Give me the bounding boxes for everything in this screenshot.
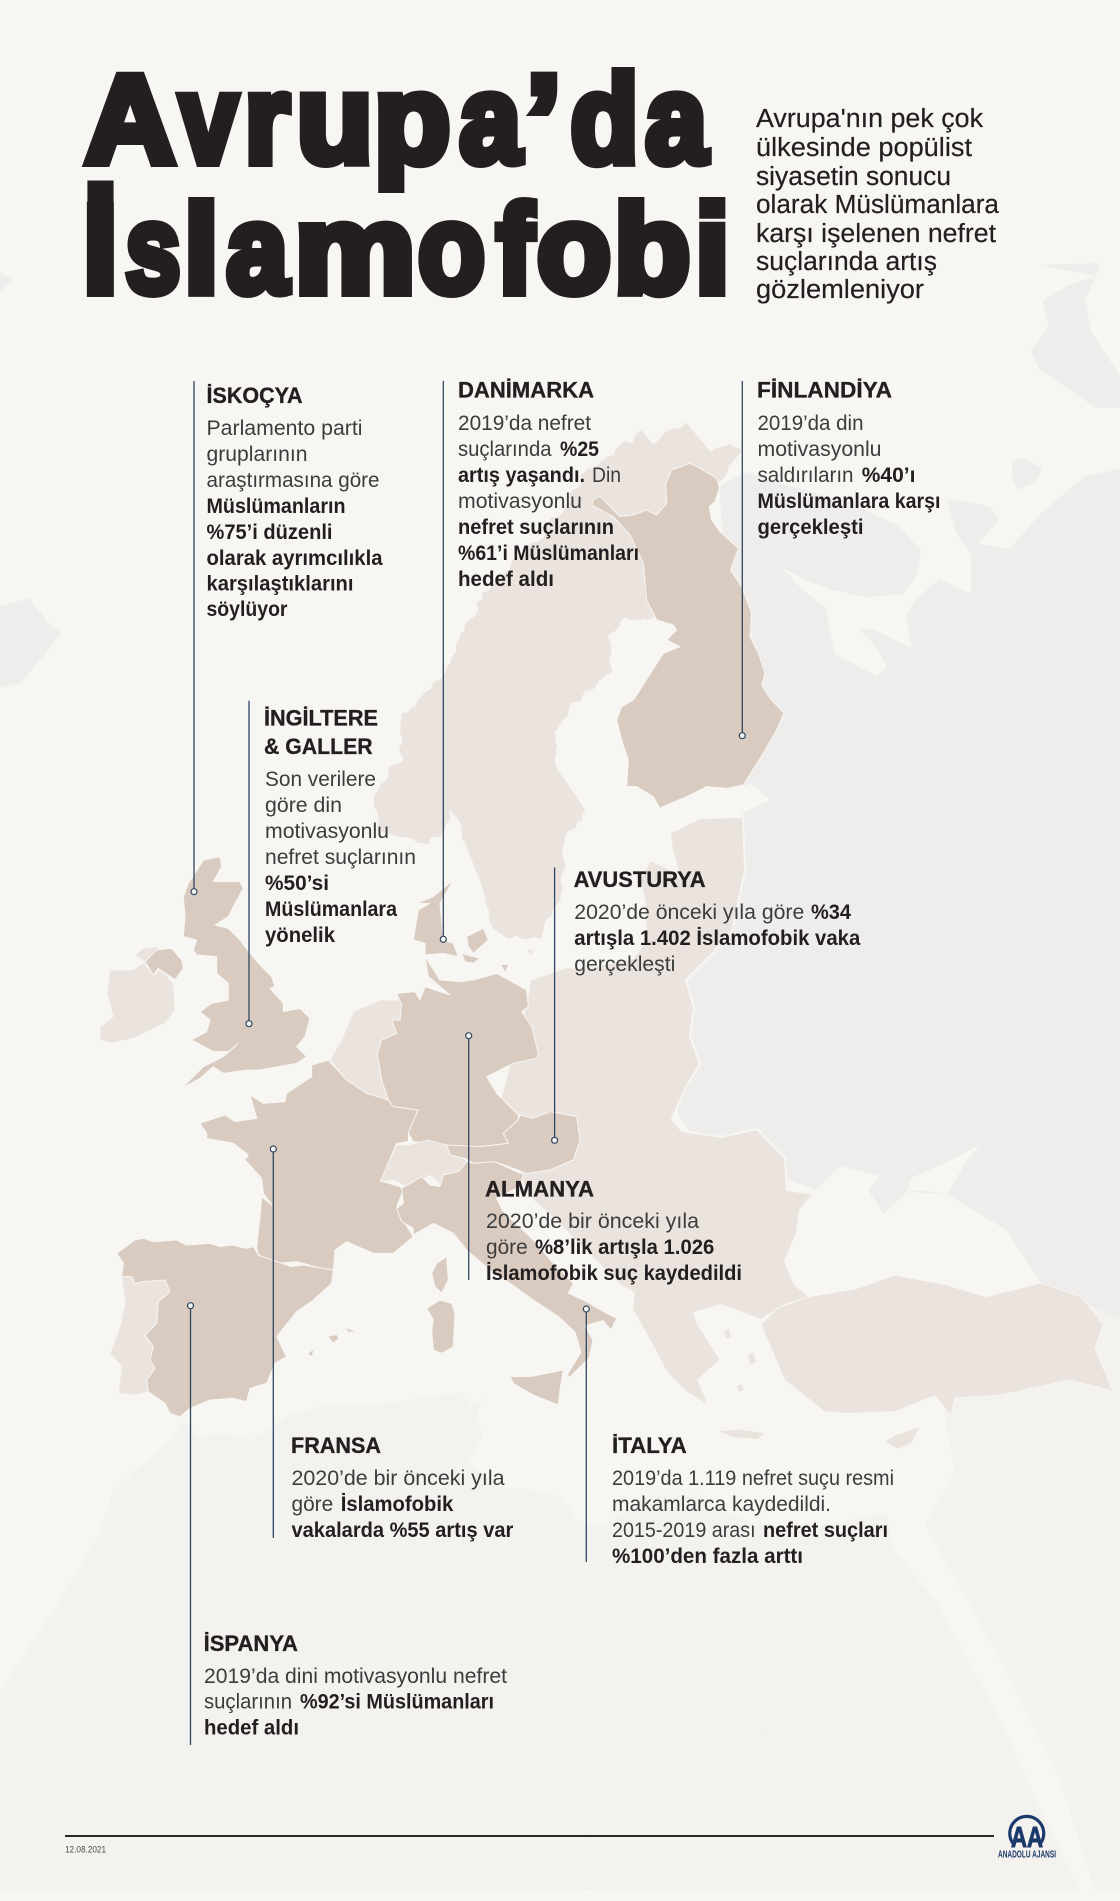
body: Müslümanlara	[265, 898, 397, 921]
body: karşılaştıklarını	[206, 572, 354, 596]
heading	[264, 706, 378, 759]
leader line	[190, 1309, 192, 1745]
Norway and Sweden	[371, 422, 743, 940]
Kolguev island	[1012, 458, 1042, 490]
Denmark	[413, 880, 533, 972]
panel: Finlandiya	[739, 378, 940, 739]
title: i	[695, 180, 730, 320]
body: %8’lik artışla 1.026	[535, 1236, 714, 1259]
body: motivasyonlu	[458, 489, 582, 513]
Sardinia	[427, 1300, 455, 1353]
logo letters: AA	[1011, 1822, 1043, 1854]
body: gerçekleşti	[758, 516, 864, 539]
logo arc	[1010, 1816, 1044, 1844]
body	[204, 1664, 507, 1740]
footer rule	[65, 1835, 994, 1837]
western Europe countries	[100, 857, 580, 1272]
body: göre	[292, 1492, 333, 1516]
title: a	[646, 50, 708, 190]
marker	[583, 1306, 589, 1312]
body	[458, 411, 639, 591]
marker	[270, 1146, 276, 1152]
body: makamlarca kaydedildi.	[612, 1492, 831, 1516]
leader line	[272, 1152, 274, 1538]
intro text: olarak Müslümanlara	[756, 191, 1000, 219]
heading: İTALYA	[612, 1433, 687, 1458]
heading: FİNLANDİYA	[757, 378, 892, 402]
Italy	[397, 1162, 617, 1378]
body	[265, 767, 416, 947]
marker	[246, 1021, 252, 1027]
title: a	[226, 180, 289, 320]
Finland	[592, 463, 784, 808]
body: suçlarında	[458, 437, 552, 461]
logo wordmark: ANADOLU AJANSI	[998, 1849, 1056, 1860]
Svalbard fragment	[0, 272, 12, 292]
Cyprus and Crete	[719, 1427, 919, 1449]
body: motivasyonlu	[758, 437, 882, 461]
Sea of Azov	[907, 1145, 980, 1194]
body: vakalarda %55 artış var	[292, 1519, 513, 1542]
body: 2019’da dini motivasyonlu nefret	[204, 1664, 507, 1688]
title: ’	[526, 50, 561, 190]
title: p	[374, 50, 450, 190]
marker	[552, 1137, 558, 1143]
body: artış yaşandı.	[458, 464, 585, 487]
body: %75’i düzenli	[206, 521, 332, 544]
title: d	[570, 50, 638, 190]
body: 2019’da 1.119 nefret suçu resmi	[612, 1466, 894, 1490]
title: İ	[83, 180, 118, 320]
body: göre	[486, 1235, 528, 1259]
body	[486, 1209, 742, 1285]
heading: & GALLER	[264, 734, 373, 759]
body: nefret suçları	[763, 1519, 888, 1542]
leader line	[741, 381, 743, 733]
body: suçlarının	[204, 1690, 292, 1714]
leader line	[193, 381, 195, 889]
heading: İSKOÇYA	[206, 383, 303, 408]
Portugal	[110, 1277, 170, 1395]
marker	[466, 1033, 472, 1039]
southern Europe countries	[110, 1162, 617, 1417]
body: göre din	[265, 793, 342, 817]
body: hedef aldı	[458, 568, 554, 591]
body: 2019’da nefret	[458, 411, 591, 435]
title: a	[460, 50, 522, 190]
Switzerland	[380, 1140, 467, 1187]
marker	[739, 733, 745, 739]
Aegean islands	[724, 1329, 756, 1392]
Iceland	[0, 598, 61, 687]
intro text: Avrupa'nın pek çok	[756, 105, 983, 133]
body	[612, 1466, 894, 1568]
body: Son verilere	[265, 767, 376, 791]
Balearic Islands	[308, 1328, 355, 1356]
bottom margin strip	[0, 1890, 1120, 1901]
body: Parlamento parti	[206, 416, 362, 440]
body: %25	[560, 438, 599, 461]
title: v	[180, 50, 238, 190]
body: nefret suçlarının	[458, 516, 614, 539]
body	[574, 900, 861, 976]
Russia, Ukraine and Belarus land	[670, 469, 1120, 1320]
body: Müslümanlara karşı	[758, 490, 940, 513]
title: o	[418, 180, 485, 320]
Sicily	[510, 1370, 563, 1405]
body: artışla 1.402 İslamofobik vaka	[574, 927, 861, 950]
marker	[440, 936, 446, 942]
marker	[191, 889, 197, 895]
date: 12.08.2021	[65, 1845, 106, 1855]
logo: Anadolu Ajansı	[998, 1816, 1056, 1860]
intro text: karşı işelenen nefret	[756, 220, 996, 248]
leader line	[554, 868, 556, 1138]
Novaya Zemlya	[1031, 263, 1120, 408]
faint eastern border lines	[500, 1016, 990, 1162]
north Africa land	[0, 1392, 1080, 1890]
Ireland	[100, 947, 175, 1043]
leader line	[248, 701, 250, 1021]
body: %61’i Müslümanları	[458, 542, 639, 565]
leader line	[585, 1312, 587, 1562]
body: hedef aldı	[204, 1716, 299, 1740]
heading: ALMANYA	[485, 1176, 594, 1202]
body: motivasyonlu	[265, 819, 389, 843]
body: %40’ı	[862, 464, 915, 487]
Northern Ireland	[145, 948, 183, 980]
body: gruplarının	[206, 442, 308, 466]
panel: İngiltere ve Galler	[246, 701, 416, 1027]
body	[292, 1466, 513, 1542]
title: s	[126, 180, 180, 320]
heading: FRANSA	[291, 1433, 381, 1458]
Turkey	[761, 1275, 1113, 1415]
body	[206, 416, 383, 621]
leader line	[442, 381, 444, 936]
body: 2020’de bir önceki yıla	[486, 1209, 699, 1233]
body: 2019’da din	[758, 411, 864, 435]
Netherlands and Belgium	[330, 1000, 402, 1100]
body: İslamofobik	[341, 1493, 454, 1516]
title: b	[614, 180, 690, 320]
body: gerçekleşti	[574, 952, 675, 976]
intro text: ülkesinde popülist	[756, 134, 972, 162]
intro text	[756, 105, 1000, 304]
middle east land	[925, 1250, 1120, 1890]
faint African border lines	[0, 1500, 990, 1890]
body: %100’den fazla arttı	[612, 1545, 803, 1568]
panel: Fransa	[270, 1146, 513, 1542]
Great Britain	[182, 857, 310, 1088]
body: Din	[592, 463, 621, 487]
heading: AVUSTURYA	[574, 867, 706, 892]
body: 2020’de bir önceki yıla	[292, 1466, 505, 1490]
body: %92’si Müslümanları	[300, 1691, 494, 1714]
panel: İspanya	[188, 1303, 507, 1745]
panel: İskoçya	[191, 381, 383, 895]
heading: İNGİLTERE	[264, 706, 378, 730]
Spain	[117, 1238, 333, 1417]
Corsica	[432, 1257, 448, 1293]
intro text: gözlemleniyor	[756, 276, 925, 304]
panel: İtalya	[583, 1306, 894, 1568]
heading: İSPANYA	[204, 1631, 298, 1656]
body: araştırmasına göre	[206, 468, 380, 492]
title: A	[85, 50, 175, 190]
intro text: suçlarında artış	[756, 248, 937, 276]
body: İslamofobik suç kaydedildi	[486, 1262, 742, 1285]
Austria	[447, 1112, 580, 1173]
Germany	[377, 957, 538, 1150]
eastern Europe and Balkans	[500, 817, 814, 1407]
body: yönelik	[265, 924, 335, 947]
body: %34	[811, 901, 851, 924]
marker	[188, 1303, 194, 1309]
title: l	[184, 180, 219, 320]
title	[83, 50, 730, 320]
panel: Avusturya	[552, 867, 861, 1143]
body: 2020’de önceki yıla göre	[574, 900, 804, 924]
intro text: siyasetin sonucu	[756, 163, 951, 191]
body: olarak ayrımcılıkla	[206, 547, 383, 570]
body: Müslümanların	[206, 495, 346, 518]
leader line	[468, 1038, 470, 1280]
heading: DANİMARKA	[458, 378, 594, 402]
body: 2015-2019 arası	[612, 1518, 756, 1542]
title: o	[537, 180, 611, 320]
France	[200, 1060, 418, 1272]
body	[758, 411, 940, 539]
panel: Almanya	[466, 1033, 742, 1285]
title: f	[496, 180, 534, 320]
body: saldırıların	[758, 463, 854, 487]
title: m	[294, 180, 416, 320]
title: u	[296, 50, 373, 190]
title: r	[244, 50, 290, 190]
body: %50’si	[265, 872, 329, 895]
body: söylüyor	[206, 598, 288, 621]
panel: Danimarka	[440, 378, 639, 942]
body: nefret suçlarının	[265, 845, 416, 869]
